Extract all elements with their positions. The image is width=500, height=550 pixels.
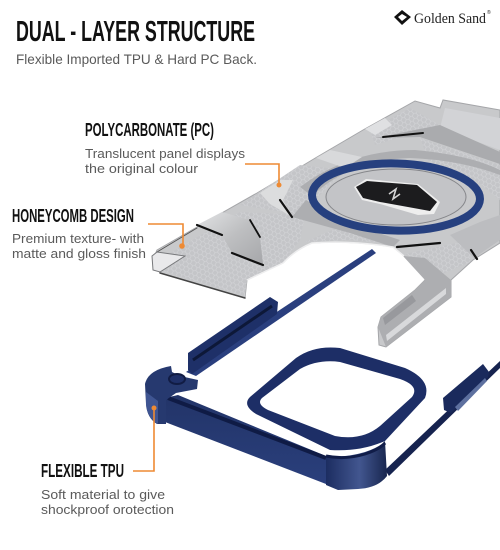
right rail with buttons <box>385 361 500 476</box>
long bottom bar <box>165 395 326 484</box>
text block: honeycomb design: matte and gloss finish <box>12 246 146 261</box>
callout: honeycomb leader <box>148 224 185 249</box>
camera surround ring <box>247 347 426 450</box>
text block: polycarbonate <box>85 120 246 176</box>
logo: Golden Sand <box>394 9 491 27</box>
inner magnetic disc <box>326 169 466 225</box>
left corner cap <box>145 366 198 424</box>
callout: TPU leader <box>133 406 156 471</box>
panel base <box>153 100 500 347</box>
title: DUAL - LAYER STRUCTURE <box>16 16 255 48</box>
text block: flexible TPU <box>41 461 174 517</box>
grey bands <box>300 150 500 196</box>
text block: honeycomb design: Premium texture- with <box>12 231 144 246</box>
text block: honeycomb design <box>12 206 146 261</box>
black logo plate <box>354 179 440 215</box>
text block: flexible TPU: Soft material to give <box>41 487 165 502</box>
logo: Golden Sand: Golden Sand <box>414 11 486 27</box>
polycarbonate back panel <box>152 100 500 347</box>
blue TPU frame <box>145 249 500 490</box>
black edge marks <box>157 133 477 298</box>
blue magnetic ring <box>311 161 481 233</box>
icon: diamond mark <box>394 10 411 25</box>
logo: Golden Sand: ® <box>487 9 491 16</box>
upper left rail <box>186 249 376 376</box>
subtitle: Flexible Imported TPU & Hard PC Back. <box>16 51 257 67</box>
text block: flexible TPU: shockproof orotection <box>41 502 174 517</box>
right corner cap <box>326 441 387 490</box>
clear clips <box>197 212 263 264</box>
text block: polycarbonate: the original colour <box>85 161 199 176</box>
text block: flexible TPU: FLEXIBLE TPU <box>41 461 124 481</box>
callout: polycarbonate leader <box>245 164 282 188</box>
honeycomb texture <box>162 212 305 296</box>
cutout light rim <box>247 242 404 280</box>
text block: honeycomb design: HONEYCOMB DESIGN <box>12 206 134 226</box>
left end clip <box>152 252 185 272</box>
text block: polycarbonate: POLYCARBONATE (PC) <box>85 120 214 140</box>
text block: polycarbonate: Translucent panel displays <box>85 146 246 161</box>
